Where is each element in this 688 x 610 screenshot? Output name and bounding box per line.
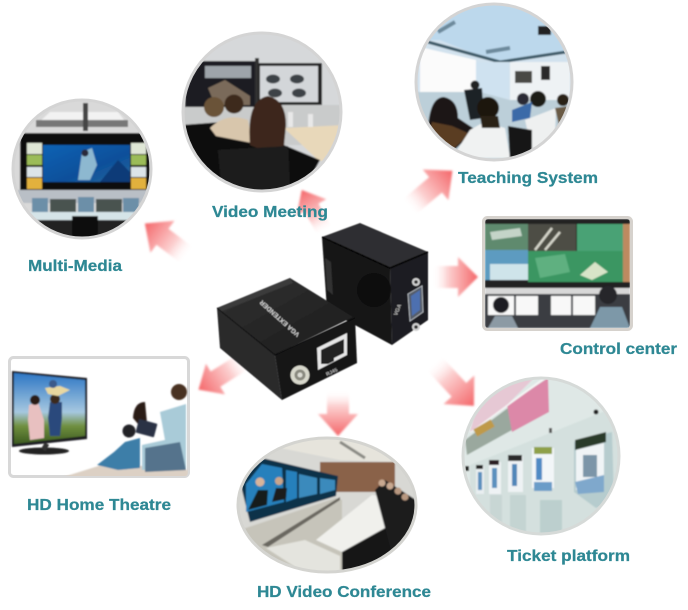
circle frame	[463, 378, 619, 534]
arrow: to Control center	[432, 257, 478, 297]
product: VGA extender pair	[217, 223, 428, 400]
panel: Video Meeting	[182, 30, 344, 221]
arrow: to HD Home Theatre	[189, 345, 256, 405]
label: Ticket platform: Ticket platform	[507, 548, 630, 565]
panel: Multi-Media	[10, 98, 154, 275]
arrow: to Multi-Media	[133, 208, 200, 272]
panel: Control center	[484, 218, 677, 358]
label: HD Video Conference: HD Video Conference	[257, 584, 431, 601]
ellipse frame	[238, 438, 416, 572]
power connector	[290, 366, 310, 384]
arrow: to Ticket platform	[418, 348, 489, 420]
photo: multimedia screen wall	[14, 102, 150, 236]
photo: meeting room	[182, 30, 344, 194]
panel: HD Home Theatre	[10, 358, 188, 514]
frame	[484, 218, 632, 330]
RJ45 port: RJ45	[325, 367, 339, 378]
photo: ticket machines	[464, 380, 618, 532]
label: Video Meeting: Video Meeting	[212, 204, 328, 221]
left extender (RJ45 port)	[217, 278, 357, 400]
label printed on case: VGA EXTENDER	[259, 298, 301, 338]
label: Control center: Control center	[560, 341, 677, 358]
circle frame	[416, 4, 572, 160]
label: Teaching System: Teaching System	[458, 170, 598, 187]
right extender (VGA port)	[322, 223, 428, 345]
photo: family watching TV	[12, 371, 188, 478]
photo: control room video wall	[485, 219, 630, 328]
panel: Ticket platform	[460, 372, 630, 565]
photo: classroom	[414, 2, 574, 162]
VGA port: VGA	[393, 303, 403, 317]
arrow: to Video Meeting	[287, 182, 340, 240]
frame	[10, 358, 188, 476]
circle frame	[183, 33, 341, 191]
photo: conference room	[237, 437, 419, 575]
panel: Teaching System	[414, 2, 598, 187]
circle frame	[13, 100, 151, 238]
label: HD Home Theatre: HD Home Theatre	[27, 497, 171, 514]
arrow: to Teaching System	[395, 155, 465, 223]
arrow: to HD Video Conference	[318, 390, 358, 436]
label: Multi-Media: Multi-Media	[28, 258, 122, 275]
panel: HD Video Conference	[237, 437, 431, 601]
